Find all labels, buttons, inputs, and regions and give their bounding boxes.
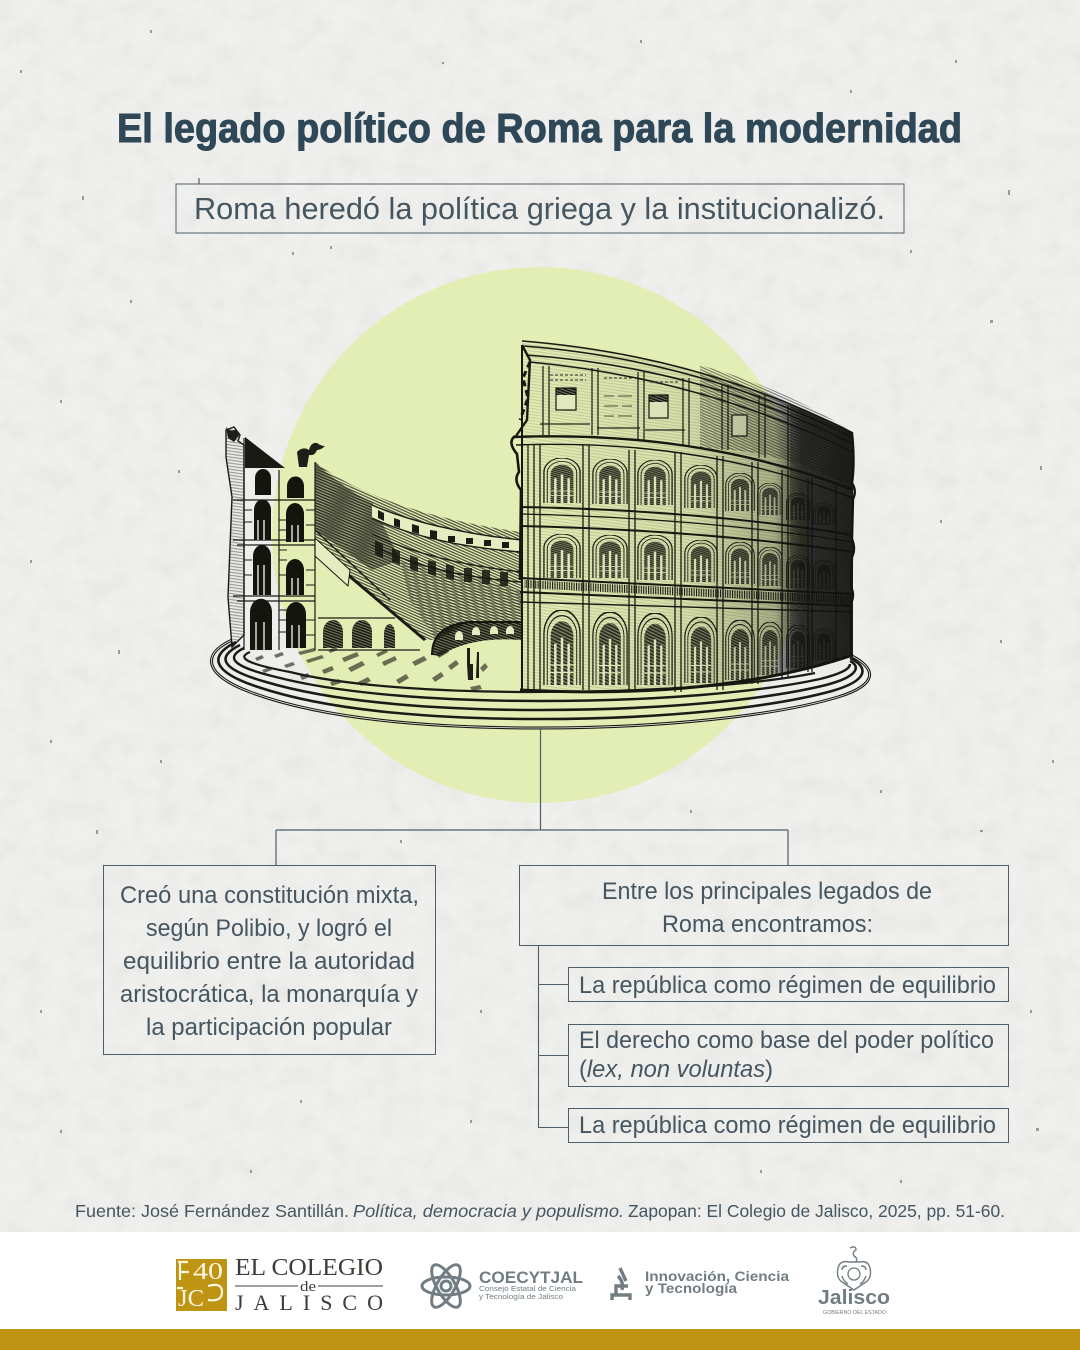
logo: El Colegio de Jalisco: 40 bbox=[193, 1259, 223, 1285]
logo: COECYTJAL: y Tecnología de Jalisco bbox=[479, 1294, 563, 1301]
logo: El Colegio de Jalisco: EL COLEGIO bbox=[235, 1255, 383, 1281]
logo: El Colegio de Jalisco: JC bbox=[178, 1286, 204, 1312]
vault and lower arcade bbox=[318, 618, 521, 656]
text box: constitución mixta: según Polibio, y logró el bbox=[146, 915, 392, 942]
illustration: Colosseum engraving bbox=[211, 340, 870, 728]
logo: Innovación, Ciencia y Tecnología: y Tecnología bbox=[645, 1280, 737, 1296]
logo: Innovación, Ciencia y Tecnología: Innovación, Ciencia bbox=[645, 1268, 789, 1284]
connector: legacy list tree bbox=[538, 945, 568, 1128]
logo: Jalisco Gobierno del Estado: Jalisco bbox=[818, 1287, 890, 1309]
logo: COECYTJAL bbox=[422, 1261, 583, 1311]
arcade: upper row bbox=[544, 458, 834, 525]
text box: constitución mixta: la participación popular bbox=[146, 1014, 392, 1041]
green circle bbox=[272, 267, 808, 803]
arcade: ground row bbox=[544, 610, 834, 685]
legacy item 3: La república como régimen de equilibrio bbox=[579, 1112, 996, 1139]
legacy item 2 bbox=[568, 1024, 1008, 1086]
inner wall and seating bbox=[315, 462, 521, 640]
connector: main trunk and branches bbox=[276, 728, 788, 865]
logo: Jalisco Gobierno del Estado bbox=[818, 1247, 890, 1316]
subtitle box bbox=[176, 184, 904, 233]
legacy item 1: La república como régimen de equilibrio bbox=[579, 972, 996, 999]
source citation: Fuente: José Fernández Santillán. bbox=[75, 1201, 349, 1221]
legacy item 2: (lex, non voluntas) bbox=[579, 1056, 773, 1083]
logo: Innovación, Ciencia y Tecnología bbox=[612, 1268, 789, 1300]
cornice bands bbox=[511, 345, 853, 692]
pilasters bbox=[534, 445, 836, 692]
source citation bbox=[75, 1201, 1005, 1221]
text box: constitución mixta: aristocrática, la monarquía y bbox=[120, 981, 419, 1008]
attic storey bbox=[516, 341, 853, 490]
text box: constitución mixta bbox=[104, 866, 436, 1054]
source citation: Política, democracia y populismo. bbox=[353, 1201, 624, 1221]
logo: Jalisco Gobierno del Estado: GOBIERNO DEL ESTADO bbox=[823, 1310, 886, 1316]
left tower bbox=[226, 427, 325, 650]
logo: El Colegio de Jalisco: JALISCO bbox=[235, 1290, 383, 1315]
logo: COECYTJAL: Consejo Estatal de Ciencia bbox=[479, 1286, 576, 1293]
text box: principales legados: Entre los principales legados de bbox=[602, 878, 932, 905]
text box: constitución mixta: equilibrio entre la autoridad bbox=[123, 948, 415, 975]
text box: constitución mixta: Creó una constitución mixta, bbox=[120, 882, 419, 909]
text box: principales legados: Roma encontramos: bbox=[662, 911, 873, 938]
logo: El Colegio de Jalisco: de bbox=[300, 1279, 316, 1295]
logo: El Colegio de Jalisco bbox=[176, 1255, 383, 1315]
source citation: Zapopan: El Colegio de Jalisco, 2025, pp. 51-60. bbox=[628, 1201, 1005, 1221]
arcade: middle row bbox=[544, 534, 834, 590]
legacy item 2: El derecho como base del poder político bbox=[579, 1027, 994, 1054]
right end in shadow bbox=[622, 356, 853, 689]
main wall: mid-tone hatching bbox=[520, 341, 853, 692]
arena floor bbox=[255, 647, 488, 691]
footer band bbox=[0, 1232, 1080, 1350]
logo: COECYTJAL: COECYTJAL bbox=[479, 1268, 583, 1287]
title: El legado político de Roma para la modernidad bbox=[117, 105, 962, 151]
figures in arena bbox=[467, 648, 479, 680]
subtitle box: Roma heredó la política griega y la institucionalizó. bbox=[194, 191, 885, 226]
text box: principales legados bbox=[520, 866, 1008, 946]
stepped base bbox=[211, 640, 870, 728]
